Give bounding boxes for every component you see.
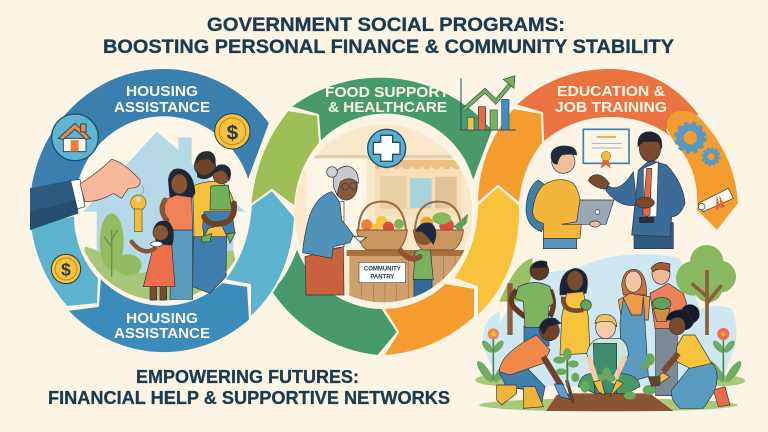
panel: food and healthcare ring [224, 77, 493, 356]
scene: family receiving house key [30, 114, 267, 303]
ring labels: HOUSING [126, 310, 198, 327]
bottom heading: FINANCIAL HELP & SUPPORTIVE NETWORKS [48, 388, 450, 408]
basket right [413, 202, 468, 250]
ring labels: JOB TRAINING [555, 99, 667, 116]
man carrying child [193, 151, 235, 293]
girl [132, 221, 175, 300]
basket left [357, 202, 407, 250]
kneeling centre volunteer [578, 314, 640, 397]
ring labels: FOOD SUPPORT [325, 84, 449, 101]
soil bed [479, 393, 738, 412]
ring labels: ASSISTANCE [114, 325, 210, 342]
hand with key [30, 159, 146, 232]
icon: coin bottom: $ [61, 260, 71, 280]
title: BOOSTING PERSONAL FINANCE & COMMUNITY STABILITY [103, 37, 674, 58]
student [526, 146, 614, 249]
bottom heading [48, 367, 450, 408]
kneeling left volunteer [497, 318, 573, 408]
scene: community garden volunteers [474, 245, 745, 412]
flowers [474, 328, 745, 386]
ring labels: EDUCATION & [557, 83, 665, 100]
pantry counter [346, 250, 464, 302]
icon: medical cross [368, 129, 406, 167]
trees [499, 245, 736, 335]
icon: coin bottom [51, 254, 81, 284]
woman [162, 169, 195, 299]
icon: coin top [215, 114, 250, 149]
chart: rising bars and arrow [461, 76, 516, 130]
child body [398, 248, 434, 297]
scene: community pantry [293, 76, 516, 309]
seedlings [553, 348, 656, 400]
scene: student and mentor [526, 123, 733, 249]
title [103, 15, 674, 58]
ring labels: & HEALTHCARE [328, 99, 447, 116]
icon: coin top: $ [227, 121, 239, 144]
standing group [511, 261, 687, 396]
ring labels [114, 83, 667, 342]
icon: diploma scroll [698, 188, 733, 212]
panel: education ring [453, 68, 738, 317]
bottom heading: EMPOWERING FUTURES: [136, 367, 359, 387]
icon: house [52, 114, 98, 161]
ring labels: HOUSING [126, 83, 198, 100]
sign: community pantry [359, 262, 406, 283]
panel: housing ring [30, 68, 270, 353]
title: GOVERNMENT SOCIAL PROGRAMS: [207, 15, 565, 36]
grandmother [303, 166, 367, 295]
kneeling right volunteer [648, 305, 730, 408]
sign: community pantry: PANTRY [370, 274, 394, 280]
ring labels: ASSISTANCE [114, 99, 210, 116]
sign: community pantry: COMMUNITY [364, 267, 401, 273]
mentor [588, 132, 685, 249]
certificate [583, 129, 629, 168]
icon: gears [676, 123, 719, 165]
